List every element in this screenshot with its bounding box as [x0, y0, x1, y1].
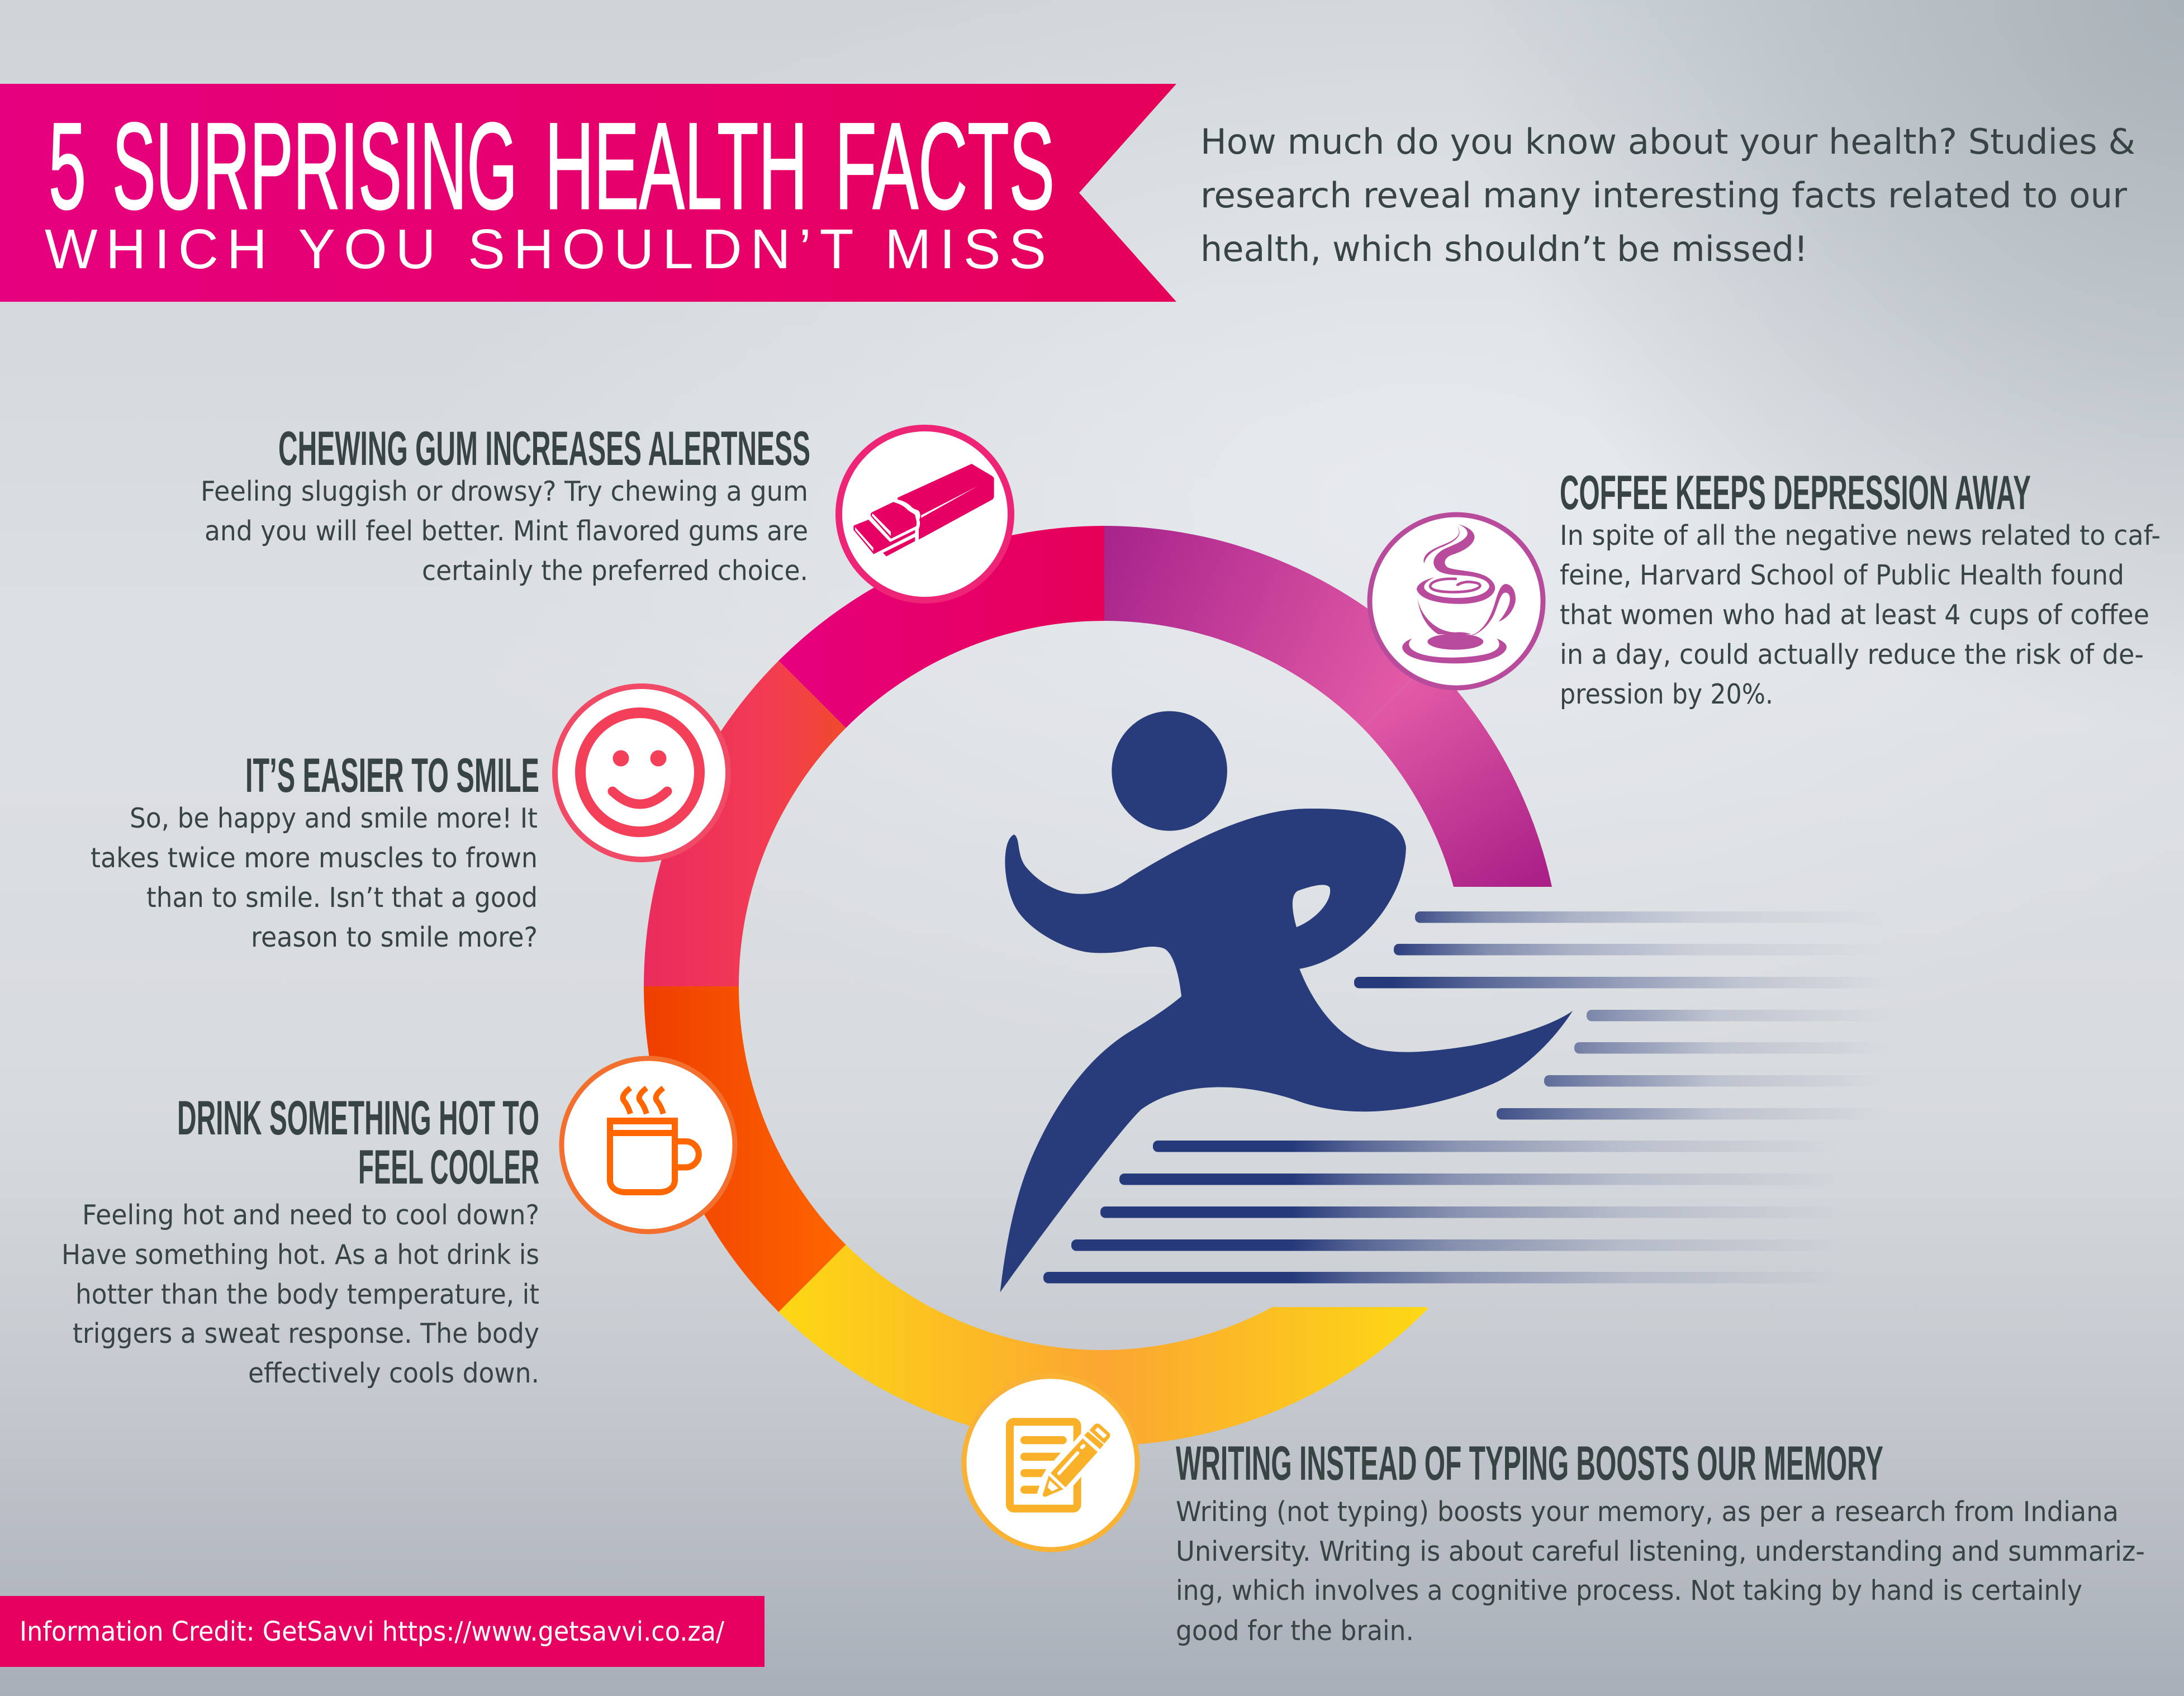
credit bar	[0, 1596, 765, 1667]
text: coffee: in a day, could actually reduce the risk of de-	[1560, 639, 2144, 671]
ring segment: coffee purple tail	[1362, 661, 1552, 887]
intro text: health, which shouldn’t be missed!	[1200, 229, 1808, 269]
text: hot drink: triggers a sweat response. The body	[73, 1318, 539, 1350]
text: smile	[91, 802, 538, 953]
text: chewing gum: and you will feel better. Mint flavored gums are	[205, 515, 808, 547]
text: hot drink: Have something hot. As a hot drink is	[61, 1239, 539, 1271]
text: coffee: feine, Harvard School of Public Health found	[1560, 559, 2124, 591]
ring segment: hot drink orange	[644, 986, 846, 1312]
runner body	[1000, 809, 1573, 1293]
icon: hot mug	[562, 1058, 735, 1232]
panel: coffee	[1370, 466, 2161, 710]
text: hot drink: Feeling hot and need to cool down?	[82, 1199, 539, 1231]
text: writing: Writing (not typing) boosts your memory, as per a research from Indiana	[1176, 1496, 2119, 1528]
text: writing: University. Writing is about careful listening, understanding and summariz-	[1176, 1536, 2145, 1567]
text: coffee	[1560, 520, 2161, 710]
text: coffee: pression by 20%.	[1560, 678, 1773, 710]
intro text: How much do you know about your health? Studies &	[1200, 121, 2135, 162]
panel: writing	[964, 1376, 2145, 1647]
text: chewing gum: certainly the preferred choice.	[422, 555, 808, 587]
title: 5	[49, 97, 86, 235]
intro text: research reveal many interesting facts related to our	[1200, 175, 2128, 216]
title: HEALTH	[545, 97, 808, 235]
text: writing: good for the brain.	[1176, 1615, 1414, 1647]
title: FACTS	[835, 97, 1055, 235]
text: hot drink: hotter than the body temperature, it	[75, 1279, 539, 1310]
subtitle: WHICH YOU SHOULDN’T MISS	[45, 218, 1046, 281]
panel: smile	[91, 686, 728, 953]
running figure	[1000, 711, 1573, 1293]
panel: chewing gum	[201, 422, 1011, 600]
heading: smile: IT’S EASIER TO SMILE	[245, 749, 539, 802]
text: chewing gum	[201, 476, 808, 587]
panel: hot drink	[61, 1058, 735, 1389]
text: chewing gum: Feeling sluggish or drowsy? Try chewing a gum	[201, 476, 808, 507]
ring segment: coffee purple	[1104, 526, 1430, 728]
text: smile: takes twice more muscles to frown	[91, 842, 538, 874]
title: SURPRISING	[112, 97, 517, 235]
ring segment: writing yellow	[778, 1244, 1104, 1446]
icon: chewing gum	[839, 428, 1011, 600]
text: writing: ing, which involves a cognitive process. Not taking by hand is certainly	[1176, 1575, 2082, 1607]
runner head	[1112, 711, 1227, 831]
text: smile: So, be happy and smile more! It	[130, 802, 538, 834]
ring segment: writing yellow tail	[1104, 1307, 1428, 1446]
credit text: Information Credit: GetSavvi https://www.getsavvi.co.za/	[20, 1616, 725, 1647]
text: coffee: In spite of all the negative news related to caf-	[1560, 520, 2161, 552]
heading: hot drink: DRINK SOMETHING HOT TO	[177, 1091, 539, 1145]
text: writing	[1176, 1496, 2145, 1647]
heading: chewing gum: CHEWING GUM INCREASES ALERTNESS	[278, 422, 810, 476]
speed lines	[1043, 911, 1896, 1283]
ring segment: smile red	[644, 661, 846, 986]
text: smile: reason to smile more?	[251, 921, 538, 953]
heading: hot drink	[177, 1091, 539, 1194]
heading: hot drink: FEEL COOLER	[358, 1141, 539, 1194]
text: hot drink: effectively cools down.	[248, 1357, 539, 1389]
ring chart	[644, 526, 1552, 1446]
title banner	[0, 84, 1176, 302]
text: coffee: that women who had at least 4 cups of coffee	[1560, 599, 2149, 631]
icon: note and pencil	[964, 1376, 1137, 1550]
text: smile: than to smile. Isn’t that a good	[146, 882, 538, 914]
text: hot drink	[61, 1199, 539, 1389]
icon: smiley face	[555, 686, 728, 859]
intro text	[1200, 121, 2135, 269]
icon: coffee cup	[1370, 515, 1543, 688]
ring segment: gum pink	[778, 526, 1104, 728]
